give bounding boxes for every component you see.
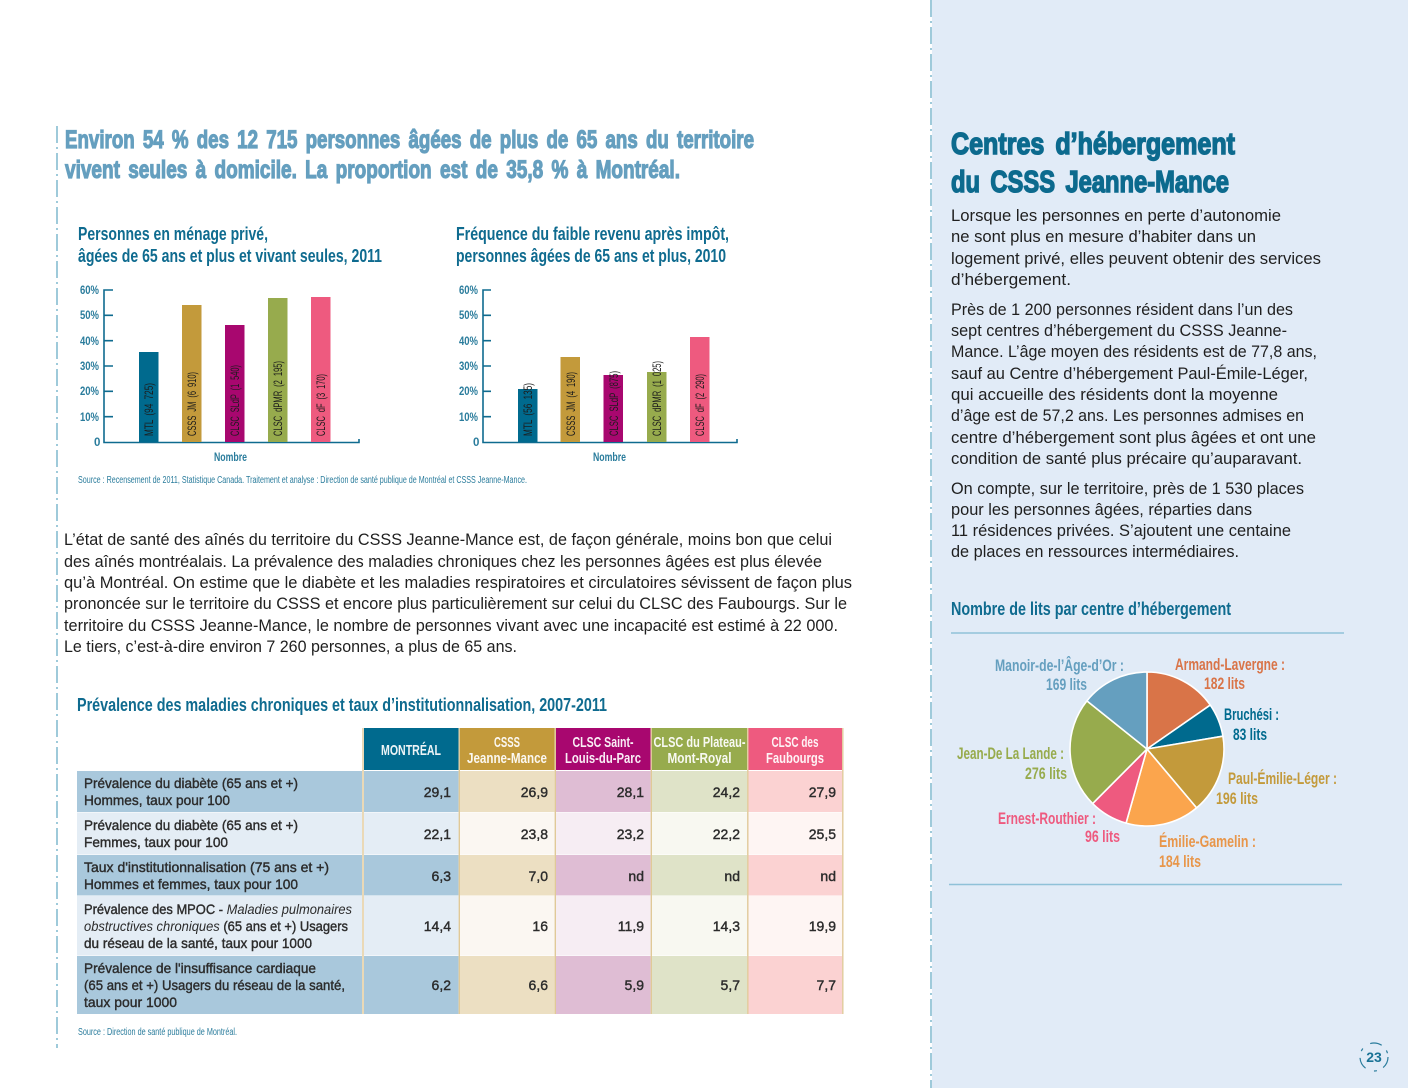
slice labels: 182 lits xyxy=(1204,674,1245,693)
bars: MTL (94 725) xyxy=(142,383,156,436)
axes and ticks: 40% xyxy=(459,336,478,348)
row: diabetes women: Femmes, taux pour 100 xyxy=(84,834,228,850)
sidebar paragraph 2: Près de 1 200 personnes résident dans l’un des xyxy=(951,300,1293,319)
panel: right sidebar background xyxy=(932,0,1408,1088)
sidebar heading: Centres d’hébergement xyxy=(951,126,1235,161)
body paragraph: prononcée sur le territoire du CSSS et encore plus particulièrement sur celui du CLSC des Faubourgs. Sur le xyxy=(64,594,847,613)
sidebar paragraph 1: logement privé, elles peuvent obtenir des services xyxy=(951,249,1321,268)
table header row: Mont-Royal xyxy=(668,750,732,767)
axes and ticks: 20% xyxy=(459,386,478,398)
row: MPOC xyxy=(77,896,842,956)
row: heart failure: taux pour 1000 xyxy=(84,994,177,1010)
sidebar paragraph 1: ne sont plus en mesure d’habiter dans un xyxy=(951,227,1256,246)
axes and ticks: 40% xyxy=(80,336,99,348)
slice labels: Armand-Lavergne : xyxy=(1175,655,1285,674)
sidebar paragraph 3 xyxy=(951,479,1304,561)
row: heart failure xyxy=(77,956,842,1014)
row: institutionalisation: Hommes et femmes, taux pour 100 xyxy=(84,876,298,892)
axes and ticks: 10% xyxy=(459,412,478,424)
row: diabetes men: 26,9 xyxy=(521,784,548,800)
axes and ticks: 0 xyxy=(94,437,100,449)
row: MPOC: 14,4 xyxy=(424,918,451,934)
axis label: Nombre xyxy=(214,452,247,464)
body paragraph: L’état de santé des aînés du territoire du CSSS Jeanne-Mance est, de façon générale, moins bon que celui xyxy=(64,530,832,549)
table header row: Jeanne-Mance xyxy=(467,750,547,767)
main heading xyxy=(65,126,754,184)
row: MPOC: Prévalence des MPOC - Maladies pulmonaires xyxy=(84,901,352,917)
row: institutionalisation: nd xyxy=(820,868,836,884)
table header row: CLSC du Plateau- xyxy=(654,734,746,751)
sidebar paragraph 2: d’âge est de 57,2 ans. Les personnes admises en xyxy=(951,406,1304,425)
axes and ticks xyxy=(459,285,737,449)
sidebar heading xyxy=(951,126,1235,199)
bars: CLSC dF (3 170) xyxy=(314,374,328,436)
body paragraph: Le tiers, c’est-à-dire environ 7 260 personnes, a plus de 65 ans. xyxy=(64,637,517,656)
pie chart: beds per centre xyxy=(957,655,1337,871)
row: MPOC: 16 xyxy=(532,918,548,934)
row: diabetes men: 27,9 xyxy=(809,784,836,800)
sidebar paragraph 3: On compte, sur le territoire, près de 1 530 places xyxy=(951,479,1304,498)
bars: CSSS JM (4 190) xyxy=(564,372,578,436)
row: heart failure: 6,2 xyxy=(432,977,451,993)
sidebar paragraph 2: centre d’hébergement sont plus âgées et ont une xyxy=(951,428,1316,447)
sidebar paragraph 2: sept centres d’hébergement du CSSS Jeanne- xyxy=(951,321,1287,340)
row: MPOC: 11,9 xyxy=(618,918,644,934)
row: heart failure: (65 ans et +) Usagers du réseau de la santé, xyxy=(84,977,345,993)
axes and ticks xyxy=(80,285,359,449)
bars: MTL (56 135) xyxy=(521,383,535,436)
sidebar paragraph 3: de places en ressources intermédiaires. xyxy=(951,542,1239,561)
bars: CLSC dPMR (1 025) xyxy=(650,361,664,436)
page number badge: 23 xyxy=(1366,1049,1382,1065)
axis label: Nombre xyxy=(593,452,626,464)
row: diabetes men xyxy=(77,771,842,812)
bars xyxy=(518,337,710,442)
sidebar paragraph 2 xyxy=(951,300,1317,468)
body paragraph: qu’à Montréal. On estime que le diabète et les maladies respiratoires et circulatoires sévissent de façon plus xyxy=(64,573,852,592)
slice labels: 96 lits xyxy=(1085,827,1120,846)
row: institutionalisation: 6,3 xyxy=(432,868,451,884)
row: diabetes women: 23,8 xyxy=(521,826,548,842)
table header row: CSSS xyxy=(494,734,520,751)
bars: CSSS JM (6 910) xyxy=(185,372,199,436)
slice labels: Bruchési : xyxy=(1224,705,1279,724)
slice labels: 169 lits xyxy=(1046,675,1087,694)
pie chart heading: Nombre de lits par centre d’hébergement xyxy=(951,599,1231,619)
table header row: Louis-du-Parc xyxy=(565,750,641,767)
axes and ticks: 30% xyxy=(459,361,478,373)
slice labels: 196 lits xyxy=(1216,789,1258,808)
table heading: Prévalence des maladies chroniques et taux d’institutionnalisation, 2007-2011 xyxy=(77,695,607,715)
chart title xyxy=(456,224,729,266)
row: MPOC: du réseau de la santé, taux pour 1000 xyxy=(84,935,312,951)
sidebar heading: du CSSS Jeanne-Mance xyxy=(951,164,1229,199)
row: diabetes men: 24,2 xyxy=(713,784,740,800)
slice labels: 83 lits xyxy=(1233,725,1267,744)
main heading: Environ 54 % des 12 715 personnes âgées de plus de 65 ans du territoire xyxy=(65,126,754,154)
axes and ticks: 0 xyxy=(473,437,479,449)
axes and ticks: 50% xyxy=(459,310,478,322)
row: diabetes women: 22,2 xyxy=(713,826,740,842)
table header row: MONTRÉAL xyxy=(381,742,441,759)
sidebar paragraph 2: sauf au Centre d’hébergement Paul-Émile-Léger, xyxy=(951,364,1308,383)
row: MPOC: obstructives chroniques (65 ans et +) Usagers xyxy=(84,918,348,934)
slice labels: 184 lits xyxy=(1159,852,1201,871)
pie slices xyxy=(1070,672,1224,826)
row: heart failure: 5,7 xyxy=(721,977,740,993)
bars: CLSC SLdP (875) xyxy=(607,371,621,436)
row: institutionalisation: 7,0 xyxy=(529,868,548,884)
axes and ticks: 60% xyxy=(459,285,478,297)
chart title: personnes âgées de 65 ans et plus, 2010 xyxy=(456,246,726,266)
axes and ticks: 60% xyxy=(80,285,99,297)
row: diabetes men: Prévalence du diabète (65 ans et +) xyxy=(84,775,298,791)
chart title xyxy=(78,224,382,266)
chart title: âgées de 65 ans et plus et vivant seules, 2011 xyxy=(78,246,382,266)
sidebar paragraph 2: condition de santé plus précaire qu’auparavant. xyxy=(951,449,1302,468)
bars: CLSC dF (2 290) xyxy=(693,374,707,436)
sidebar paragraph 1: d’hébergement. xyxy=(951,270,1071,289)
chart title: Personnes en ménage privé, xyxy=(78,224,268,244)
row: diabetes men: 29,1 xyxy=(424,784,451,800)
axes and ticks: 50% xyxy=(80,310,99,322)
table header row: Faubourgs xyxy=(766,750,824,767)
sidebar paragraph 1 xyxy=(951,206,1321,289)
row: MPOC: 14,3 xyxy=(713,918,740,934)
chart title: Fréquence du faible revenu après impôt, xyxy=(456,224,729,244)
body paragraph: des aînés montréalais. La prévalence des maladies chroniques chez les personnes âgées est plus élevée xyxy=(64,552,822,571)
body paragraph xyxy=(64,530,852,656)
sidebar paragraph 3: pour les personnes âgées, réparties dans xyxy=(951,500,1252,519)
sidebar paragraph 2: Mance. L’âge moyen des résidents est de 77,8 ans, xyxy=(951,342,1317,361)
table: chronic disease prevalence xyxy=(77,728,843,1014)
table header row: CLSC des xyxy=(772,734,818,751)
row: diabetes women: 23,2 xyxy=(617,826,644,842)
row: institutionalisation: nd xyxy=(724,868,740,884)
page number badge xyxy=(1360,1043,1388,1071)
slice labels: Manoir-de-l’Âge-d’Or : xyxy=(995,656,1124,675)
row: diabetes women xyxy=(77,812,842,854)
slice labels: Paul-Émilie-Léger : xyxy=(1228,769,1337,788)
panel: bar chart low income xyxy=(456,224,737,464)
row: heart failure: 7,7 xyxy=(817,977,836,993)
row: heart failure: 5,9 xyxy=(625,977,644,993)
axes and ticks: 20% xyxy=(80,386,99,398)
body paragraph: territoire du CSSS Jeanne-Mance, le nombre de personnes vivant avec une incapacité est estimé à 22 000. xyxy=(64,616,838,635)
axes and ticks: 10% xyxy=(80,412,99,424)
row: heart failure: Prévalence de l'insuffisance cardiaque xyxy=(84,960,316,976)
bars: CLSC SLdP (1 540) xyxy=(228,365,242,436)
row: institutionalisation xyxy=(77,855,842,896)
table source note: Source : Direction de santé publique de Montréal. xyxy=(78,1027,237,1038)
table header row: CLSC Saint- xyxy=(572,734,634,751)
row: diabetes men: Hommes, taux pour 100 xyxy=(84,792,230,808)
slice labels: Émilie-Gamelin : xyxy=(1159,832,1256,851)
row: institutionalisation: Taux d'institutionnalisation (75 ans et +) xyxy=(84,859,329,875)
table header row xyxy=(364,728,842,770)
bars xyxy=(139,297,330,442)
slice labels: Ernest-Routhier : xyxy=(998,809,1096,828)
row: diabetes men: 28,1 xyxy=(617,784,644,800)
sidebar paragraph 2: qui accueille des résidents dont la moyenne xyxy=(951,385,1278,404)
row: diabetes women: 25,5 xyxy=(809,826,836,842)
main heading: vivent seules à domicile. La proportion est de 35,8 % à Montréal. xyxy=(65,156,680,184)
axes and ticks: 30% xyxy=(80,361,99,373)
row: heart failure: 6,6 xyxy=(529,977,548,993)
slice labels: Jean-De La Lande : xyxy=(957,744,1064,763)
row: institutionalisation: nd xyxy=(628,868,644,884)
chart source note: Source : Recensement de 2011, Statistique Canada. Traitement et analyse : Direction de santé publique de Montréal et CSSS Jeanne-Mance. xyxy=(78,475,527,486)
row: MPOC: 19,9 xyxy=(809,918,836,934)
sidebar paragraph 3: 11 résidences privées. S’ajoutent une centaine xyxy=(951,521,1291,540)
sidebar paragraph 1: Lorsque les personnes en perte d’autonomie xyxy=(951,206,1281,225)
bars: CLSC dPMR (2 195) xyxy=(271,361,285,436)
row: diabetes women: 22,1 xyxy=(424,826,451,842)
row: diabetes women: Prévalence du diabète (65 ans et +) xyxy=(84,817,298,833)
slice labels xyxy=(957,655,1337,871)
slice labels: 276 lits xyxy=(1025,764,1067,783)
panel: bar chart living alone xyxy=(78,224,382,464)
